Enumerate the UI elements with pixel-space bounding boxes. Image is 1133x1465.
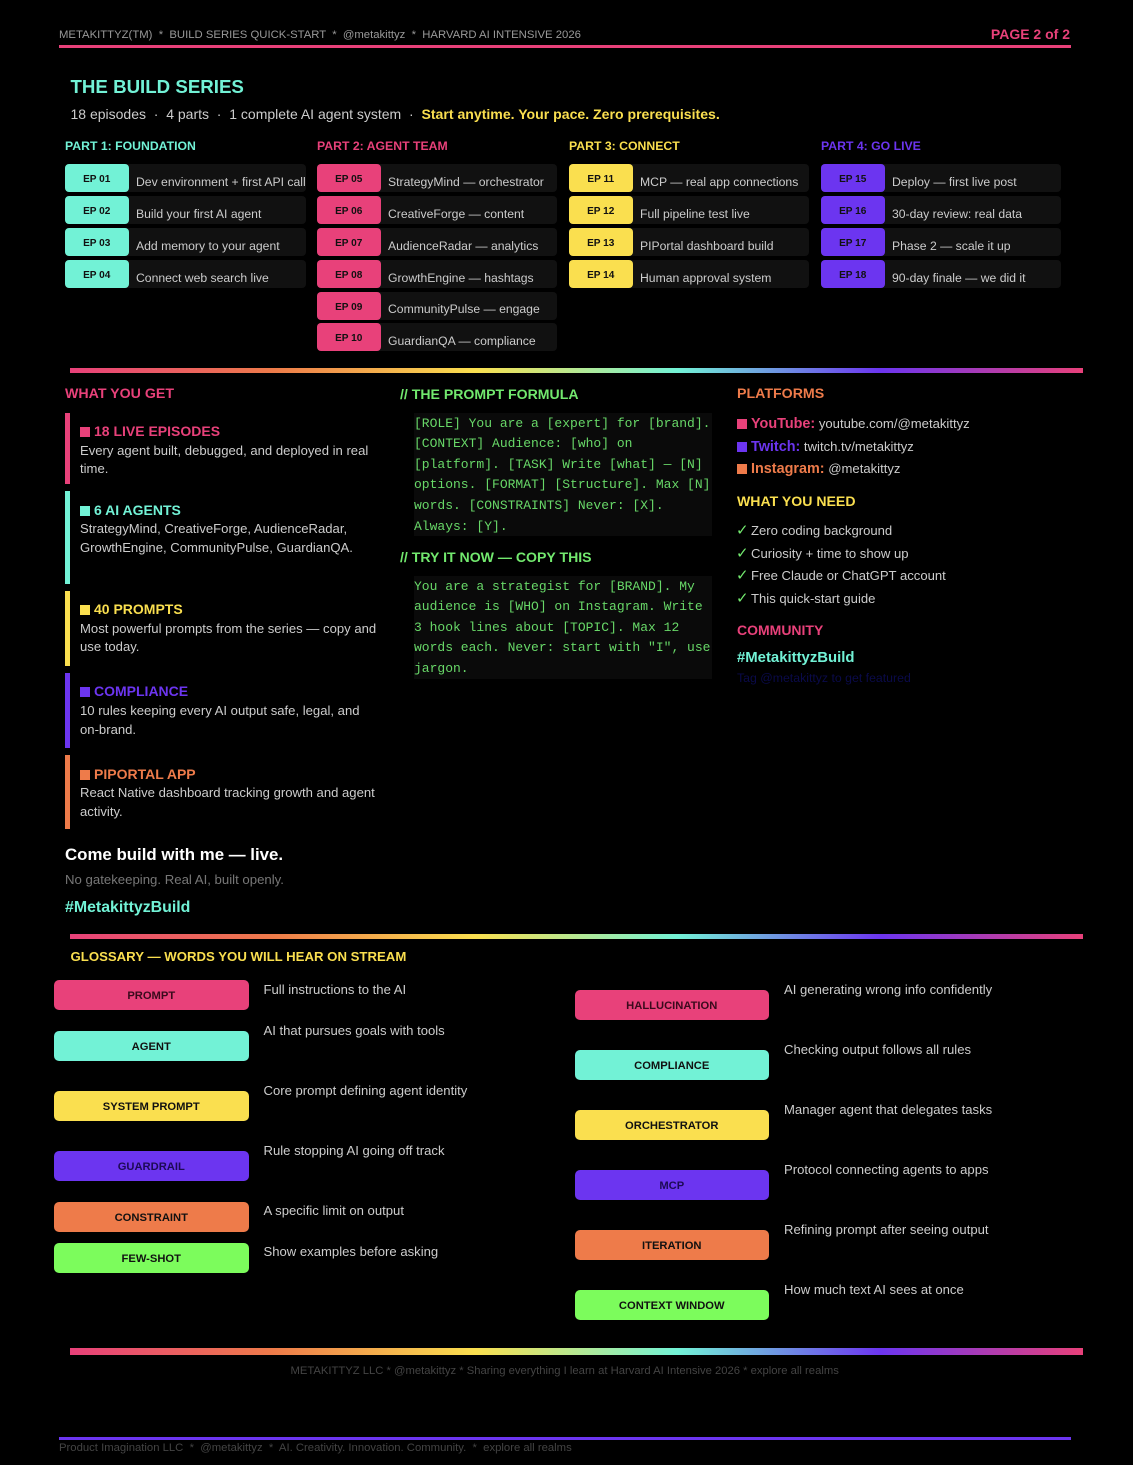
episode 8: EP 08 bbox=[335, 270, 362, 281]
term: agent bbox=[54, 1031, 248, 1061]
episode 17: Phase 2 — scale it up bbox=[892, 238, 1011, 252]
panel: platforms bbox=[737, 386, 970, 477]
episode 2: Build your first AI agent bbox=[136, 206, 261, 220]
episode 18: 90-day finale — we did it bbox=[892, 270, 1025, 284]
card: PIPortal app bbox=[65, 755, 375, 829]
episode 18 bbox=[821, 260, 1061, 288]
term: prompt bbox=[54, 980, 248, 1010]
what you need heading: WHAT YOU NEED bbox=[737, 493, 856, 509]
episode 15: Deploy — first live post bbox=[892, 174, 1017, 188]
term: agent: AGENT bbox=[132, 1041, 171, 1053]
checklist item 1: ✓ bbox=[736, 521, 749, 539]
term: orchestrator bbox=[574, 1110, 769, 1140]
footer rule bbox=[59, 1437, 1071, 1440]
term: guardrail: GUARDRAIL bbox=[118, 1161, 185, 1173]
card: 18 live episodes: 18 LIVE EPISODES bbox=[94, 423, 220, 439]
episode 4: EP 04 bbox=[83, 270, 110, 281]
YouTube link: YouTube: youtube.com/@metakittyz bbox=[751, 416, 970, 432]
card: 18 live episodes: time. bbox=[80, 461, 108, 476]
definition: guardrail: Rule stopping AI going off track bbox=[264, 1143, 445, 1158]
term: MCP: MCP bbox=[659, 1180, 684, 1192]
episode 1 bbox=[65, 164, 306, 192]
part 1 heading: PART 1: FOUNDATION bbox=[65, 139, 196, 153]
card: 6 AI agents: StrategyMind, CreativeForge, AudienceRadar, bbox=[80, 521, 347, 536]
checklist item 1: Zero coding background bbox=[751, 523, 892, 538]
card: compliance: on-brand. bbox=[80, 722, 136, 737]
term: context window: CONTEXT WINDOW bbox=[619, 1300, 725, 1312]
episode 16 bbox=[821, 196, 1061, 224]
term: MCP bbox=[574, 1170, 769, 1200]
episode 3: EP 03 bbox=[83, 238, 110, 249]
card: 6 AI agents bbox=[65, 491, 353, 584]
definition: agent: AI that pursues goals with tools bbox=[264, 1023, 445, 1038]
episode 14 bbox=[569, 260, 809, 288]
episode 7: AudienceRadar — analytics bbox=[388, 238, 538, 252]
definition: orchestrator: Manager agent that delegates tasks bbox=[784, 1102, 992, 1117]
card: compliance: 10 rules keeping every AI output safe, legal, and bbox=[80, 703, 360, 718]
panel: part 4 go live bbox=[821, 139, 1061, 288]
card: 40 prompts: Most powerful prompts from the series — copy and bbox=[80, 621, 376, 636]
term: hallucination: HALLUCINATION bbox=[626, 1000, 717, 1012]
community heading: COMMUNITY bbox=[737, 622, 823, 638]
episode 7: EP 07 bbox=[335, 238, 362, 249]
code block: try it now bbox=[414, 576, 712, 679]
Twitch link: Twitch: twitch.tv/metakittyz bbox=[751, 439, 914, 455]
card: compliance bbox=[65, 673, 360, 748]
platforms heading: PLATFORMS bbox=[737, 386, 824, 402]
code block: try it now: jargon. bbox=[414, 661, 469, 676]
episode 6 bbox=[317, 196, 557, 224]
episode 18: EP 18 bbox=[839, 270, 866, 281]
episode 10: GuardianQA — compliance bbox=[388, 334, 536, 348]
episode 13: EP 13 bbox=[587, 238, 614, 249]
card: PIPortal app: PIPORTAL APP bbox=[94, 766, 196, 782]
term: constraint: CONSTRAINT bbox=[115, 1212, 188, 1224]
episode 12: EP 12 bbox=[587, 206, 614, 217]
code block: prompt formula: [platform]. [TASK] Write [what] — [N] bbox=[414, 457, 703, 472]
checklist item 4: This quick-start guide bbox=[751, 591, 875, 606]
definition: constraint: A specific limit on output bbox=[264, 1203, 404, 1218]
card: PIPortal app: React Native dashboard tracking growth and agent bbox=[80, 785, 375, 800]
definition: compliance: Checking output follows all rules bbox=[784, 1042, 971, 1057]
episode 4 bbox=[65, 260, 306, 288]
definition: system prompt: Core prompt defining agent identity bbox=[264, 1083, 467, 1098]
card: compliance: COMPLIANCE bbox=[94, 683, 188, 699]
code block: prompt formula: words. [CONSTRAINTS] Never: [X]. bbox=[414, 498, 664, 513]
panel: glossary left bbox=[54, 980, 468, 1273]
term: compliance bbox=[574, 1050, 769, 1080]
card: 6 AI agents: 6 AI AGENTS bbox=[94, 502, 181, 518]
call to action subtext: No gatekeeping. Real AI, built openly. bbox=[65, 872, 284, 887]
episode 11: EP 11 bbox=[587, 174, 614, 185]
code block: try it now: audience is [WHO] on Instagram. Write bbox=[414, 599, 703, 614]
episode 8: GrowthEngine — hashtags bbox=[388, 270, 534, 284]
header text: METAKITTYZ(TM) * BUILD SERIES QUICK-START * @metakittyz * HARVARD AI INTENSIVE 2026 bbox=[59, 29, 581, 41]
card: 18 live episodes: Every agent built, debugged, and deployed in real bbox=[80, 443, 368, 458]
subtitle: 18 episodes · 4 parts · 1 complete AI agent system · Start anytime. Your pace. Zero prerequisites. bbox=[70, 106, 720, 122]
episode 5: StrategyMind — orchestrator bbox=[388, 174, 544, 188]
card: 6 AI agents: GrowthEngine, CommunityPulse, GuardianQA. bbox=[80, 540, 353, 555]
card: 18 live episodes bbox=[65, 413, 368, 484]
definition: few-shot: Show examples before asking bbox=[264, 1244, 438, 1259]
heading: the prompt formula: // THE PROMPT FORMULA bbox=[400, 386, 579, 402]
checklist item 4: ✓ bbox=[736, 589, 749, 607]
community note: Tag @metakittyz to get featured bbox=[737, 670, 911, 684]
episode 4: Connect web search live bbox=[136, 270, 269, 284]
card: PIPortal app: activity. bbox=[80, 804, 123, 819]
checklist item 3: ✓ bbox=[736, 566, 749, 584]
panel: community bbox=[737, 622, 911, 684]
card: 40 prompts bbox=[65, 591, 376, 666]
episode 3 bbox=[65, 228, 306, 256]
episode 11: MCP — real app connections bbox=[640, 174, 798, 188]
code block: try it now: words each. Never: start with "I", use bbox=[414, 640, 710, 655]
header rule bbox=[59, 45, 1071, 48]
episode 12 bbox=[569, 196, 809, 224]
episode 15: EP 15 bbox=[839, 174, 866, 185]
term: iteration: ITERATION bbox=[642, 1240, 701, 1252]
glossary heading: GLOSSARY — WORDS YOU WILL HEAR ON STREAM bbox=[70, 949, 406, 964]
code block: try it now: You are a strategist for [BRAND]. My bbox=[414, 579, 695, 594]
card: 40 prompts: 40 PROMPTS bbox=[94, 601, 183, 617]
part 3 heading: PART 3: CONNECT bbox=[569, 139, 680, 153]
code block: prompt formula bbox=[414, 413, 712, 536]
episode 5 bbox=[317, 164, 557, 192]
episode 1: Dev environment + first API call bbox=[136, 174, 306, 188]
definition: context window: How much text AI sees at once bbox=[784, 1282, 964, 1297]
episode 6: EP 06 bbox=[335, 206, 362, 217]
hashtag: #MetakittyzBuild bbox=[65, 899, 190, 916]
panel: what you need bbox=[736, 493, 946, 607]
episode 1: EP 01 bbox=[83, 174, 110, 185]
episode 9: EP 09 bbox=[335, 302, 362, 312]
episode 8 bbox=[317, 260, 557, 288]
episode 16: EP 16 bbox=[839, 206, 866, 217]
call to action: Come build with me — live. bbox=[65, 845, 283, 864]
title: THE BUILD SERIES bbox=[70, 76, 244, 97]
definition: iteration: Refining prompt after seeing output bbox=[784, 1222, 989, 1237]
episode 12: Full pipeline test live bbox=[640, 206, 750, 220]
term: prompt: PROMPT bbox=[127, 990, 175, 1002]
code block: try it now: 3 hook lines about [TOPIC]. Max 12 bbox=[414, 620, 679, 635]
panel: glossary right bbox=[575, 982, 992, 1320]
code block: prompt formula: options. [FORMAT] [Structure]. Max [N] bbox=[414, 477, 710, 492]
term: orchestrator: ORCHESTRATOR bbox=[625, 1120, 718, 1132]
term: hallucination bbox=[574, 990, 769, 1020]
code block: prompt formula: [ROLE] You are a [expert] for [brand]. bbox=[414, 416, 710, 431]
Instagram link: Instagram: @metakittyz bbox=[751, 461, 900, 477]
heading: try it now: // TRY IT NOW — COPY THIS bbox=[400, 549, 592, 565]
term: few-shot: FEW-SHOT bbox=[122, 1253, 181, 1265]
episode 9 bbox=[317, 292, 557, 320]
episode 9: CommunityPulse — engage bbox=[388, 302, 540, 316]
checklist item 2: ✓ bbox=[736, 544, 749, 562]
episode 15 bbox=[821, 164, 1061, 192]
page number: PAGE 2 of 2 bbox=[991, 26, 1070, 42]
term: constraint bbox=[54, 1202, 248, 1232]
card: 40 prompts: use today. bbox=[80, 639, 139, 654]
panel: what you get bbox=[65, 386, 376, 916]
episode 14: EP 14 bbox=[587, 270, 614, 281]
panel: part 1 foundation bbox=[65, 139, 306, 288]
term: compliance: COMPLIANCE bbox=[634, 1060, 709, 1072]
episode 17: EP 17 bbox=[839, 238, 866, 249]
what you get heading: WHAT YOU GET bbox=[65, 386, 174, 402]
episode 11 bbox=[569, 164, 809, 192]
closing credit line: METAKITTYZ LLC * @metakittyz * Sharing everything I learn at Harvard AI Intensive 2026 * explore all realms bbox=[290, 1364, 839, 1376]
code block: prompt formula: [CONTEXT] Audience: [who] on bbox=[414, 436, 632, 451]
checklist item 3: Free Claude or ChatGPT account bbox=[751, 568, 946, 583]
code block: prompt formula: Always: [Y]. bbox=[414, 519, 508, 534]
episode 2: EP 02 bbox=[83, 206, 110, 217]
episode 3: Add memory to your agent bbox=[136, 238, 280, 252]
part 2 heading: PART 2: AGENT TEAM bbox=[317, 139, 448, 153]
checklist item 2: Curiosity + time to show up bbox=[751, 546, 909, 561]
episode 7 bbox=[317, 228, 557, 256]
episode 16: 30-day review: real data bbox=[892, 206, 1022, 220]
term: few-shot bbox=[54, 1243, 248, 1273]
episode 2 bbox=[65, 196, 306, 224]
episode 13 bbox=[569, 228, 809, 256]
term: system prompt: SYSTEM PROMPT bbox=[103, 1101, 200, 1113]
definition: hallucination: AI generating wrong info confidently bbox=[784, 982, 992, 997]
episode 10 bbox=[317, 323, 557, 351]
episode 13: PIPortal dashboard build bbox=[640, 238, 773, 252]
episode 5: EP 05 bbox=[335, 174, 362, 185]
definition: prompt: Full instructions to the AI bbox=[264, 982, 406, 997]
community hashtag: #MetakittyzBuild bbox=[737, 650, 854, 666]
term: system prompt bbox=[54, 1091, 248, 1121]
episode 17 bbox=[821, 228, 1061, 256]
episode 10: EP 10 bbox=[335, 333, 362, 344]
term: guardrail bbox=[54, 1151, 248, 1181]
definition: MCP: Protocol connecting agents to apps bbox=[784, 1162, 989, 1177]
part 4 heading: PART 4: GO LIVE bbox=[821, 139, 921, 153]
term: iteration bbox=[574, 1230, 769, 1260]
episode 14: Human approval system bbox=[640, 270, 771, 284]
term: context window bbox=[574, 1290, 769, 1320]
episode 6: CreativeForge — content bbox=[388, 206, 524, 220]
panel: part 3 connect bbox=[569, 139, 809, 288]
panel: part 2 agent team bbox=[317, 139, 557, 351]
footer credit: Product Imagination LLC * @metakittyz * AI. Creativity. Innovation. Community. * explore all realms bbox=[59, 1442, 572, 1454]
